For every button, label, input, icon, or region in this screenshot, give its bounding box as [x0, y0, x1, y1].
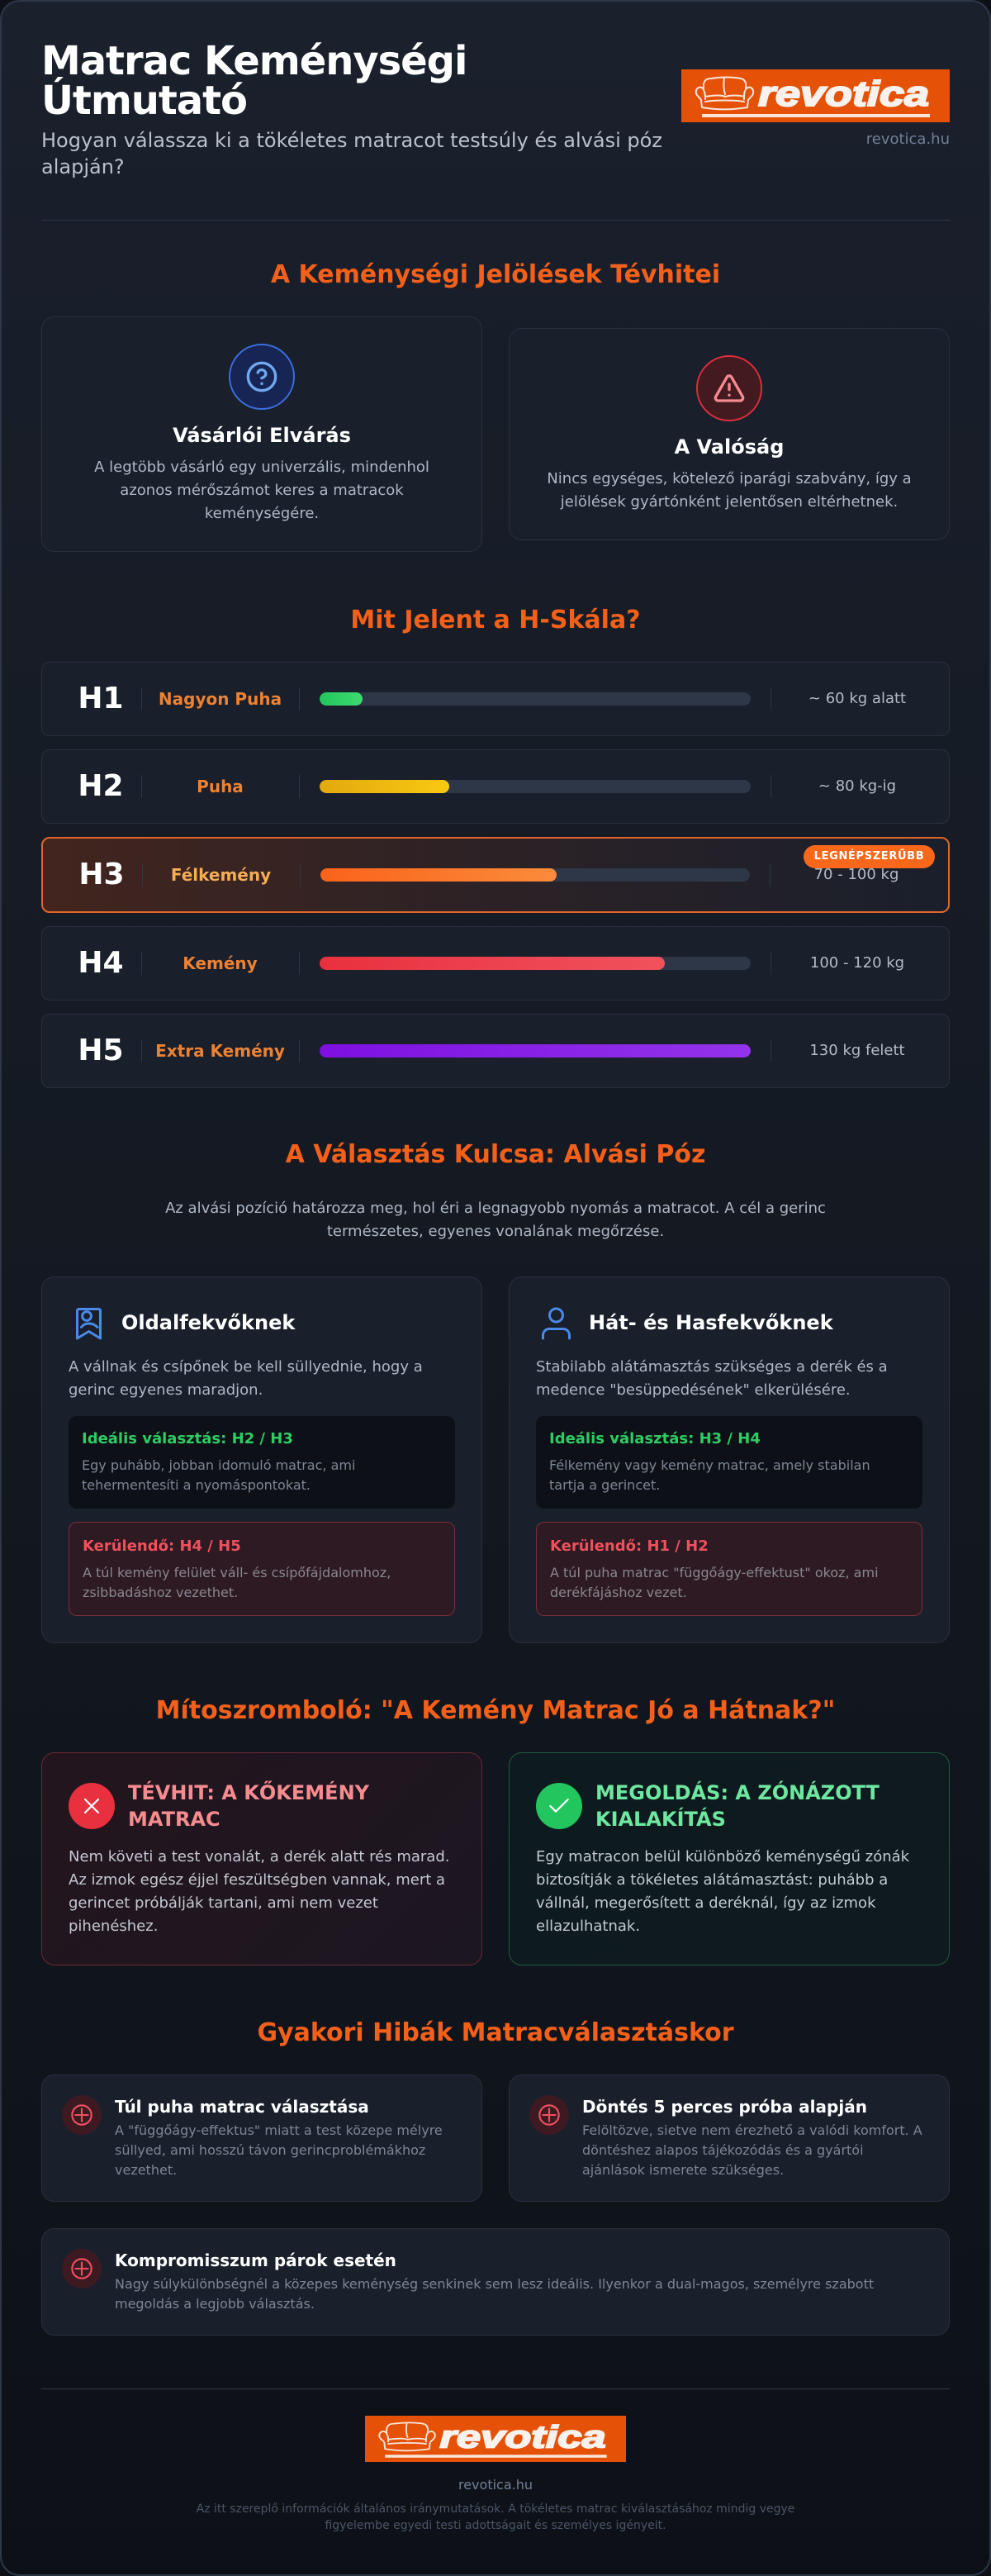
ideal choice text [82, 1457, 355, 1493]
icon: warning triangle [696, 355, 762, 421]
avoid text [550, 1565, 879, 1600]
H5 bar [320, 1044, 751, 1057]
mistake 2 text [582, 2122, 922, 2178]
reality text: jelölések gyártónként jelentősen eltérhetnek. [561, 493, 898, 511]
heading: labeling myths: A Keménységi Jelölések Tévhitei [271, 260, 720, 289]
mistake 3 text: Nagy súlykülönbségnél a közepes keménység senkinek sem lesz ideális. Ilyenkor a dual-magos, személyre szabott [115, 2276, 874, 2292]
mistake 2 title: Döntés 5 perces próba alapján [582, 2097, 867, 2117]
scale row H3 highlighted [41, 837, 950, 913]
reality text [547, 470, 912, 511]
H3 label: H3 [78, 858, 125, 891]
footer disclaimer: figyelembe egyedi testi adottságait és személyes igényeit. [325, 2519, 666, 2532]
H3 bar [320, 868, 750, 882]
mistake 1 title: Túl puha matrac választása [115, 2097, 369, 2117]
H4 bar [320, 957, 751, 970]
ideal choice text [549, 1457, 870, 1493]
buyer expectation text [94, 459, 429, 522]
footer disclaimer: Az itt szereplő információk általános iránymutatások. A tökéletes matrac kiválasztásához mindig vegye [197, 2502, 794, 2516]
intro text: Az alvási pozíció határozza meg, hol éri a legnagyobb nyomás a matracot. A cél a gerinc [165, 1200, 826, 1217]
footer disclaimer [197, 2502, 794, 2532]
solution text [536, 1848, 909, 1935]
footer website label: revotica.hu [458, 2477, 533, 2493]
myth text: Nem követi a test vonalát, a derék alatt rés marad. [69, 1848, 449, 1865]
H3 name: Félkemény [171, 865, 271, 885]
ideal choice box [536, 1416, 922, 1509]
H5 label: H5 [78, 1034, 124, 1067]
panel: myth [41, 1752, 482, 1965]
H5 weight: 130 kg felett [809, 1042, 905, 1059]
back sleepers text: medence "besüppedésének" elkerülésére. [536, 1381, 851, 1399]
myth text: Az izmok egész éjjel feszültségben vannak, mert a [69, 1871, 445, 1889]
header title: Útmutató [41, 78, 247, 124]
H4 weight: 100 - 120 kg [810, 954, 904, 972]
ideal choice text: tartja a gerincet. [549, 1477, 660, 1493]
header subtitle: alapján? [41, 155, 125, 178]
side sleepers text: gerinc egyenes maradjon. [69, 1381, 263, 1399]
panel: mistake 3 [41, 2228, 950, 2336]
solution text: ellazulhatnak. [536, 1918, 640, 1935]
mistake 3 title: Kompromisszum párok esetén [115, 2250, 396, 2270]
avoid text [83, 1565, 391, 1600]
avoid title: Kerülendő: H4 / H5 [83, 1538, 241, 1555]
buyer expectation text: keménységére. [205, 505, 319, 522]
avoid title: Kerülendő: H1 / H2 [550, 1538, 709, 1555]
panel: reality [509, 328, 950, 540]
scale row H4 [41, 926, 950, 1000]
solution heading: KIALAKÍTÁS [595, 1808, 726, 1831]
icon: mistake marker [529, 2095, 569, 2135]
myth text: pihenéshez. [69, 1918, 158, 1935]
buyer expectation heading: Vásárlói Elvárás [173, 424, 351, 447]
mistake 1 text: A "függőágy-effektus" miatt a test közepe mélyre [115, 2122, 443, 2138]
scale row H5 [41, 1014, 950, 1088]
mistake 1 text: vezethet. [115, 2162, 177, 2178]
solution text: vállnál, megerősített a deréknál, így az izmok [536, 1894, 875, 1912]
mistake 2 text: döntéshez alapos tájékozódás és a gyártói [582, 2142, 864, 2158]
intro text: természetes, egyenes vonalának megőrzése. [327, 1223, 664, 1240]
badge: most popular [804, 845, 935, 868]
icon: check [536, 1783, 582, 1829]
reality text: Nincs egységes, kötelező iparági szabvány, így a [547, 470, 912, 487]
header logo: revotica [758, 74, 929, 114]
myth heading: MATRAC [128, 1808, 220, 1831]
ideal choice text: Egy puhább, jobban idomuló matrac, ami [82, 1457, 355, 1473]
H1 weight: ~ 60 kg alatt [808, 690, 906, 707]
panel: mistake 1 [41, 2075, 482, 2202]
icon: side sleeper [76, 1308, 102, 1340]
badge: most popular: LEGNÉPSZERŰBB [814, 850, 924, 863]
H2 name: Puha [197, 777, 244, 796]
header subtitle: Hogyan válassza ki a tökéletes matracot testsúly és alvási póz [41, 129, 662, 152]
H1 name: Nagyon Puha [159, 689, 282, 709]
H2 label: H2 [78, 769, 124, 803]
solution text: Egy matracon belül különböző keménységű zónák [536, 1848, 909, 1865]
header subtitle [41, 129, 662, 178]
avoid box [69, 1522, 455, 1616]
avoid text: zsibbadáshoz vezethet. [83, 1585, 238, 1600]
icon: mistake marker [62, 2249, 102, 2288]
header logo [681, 69, 950, 122]
mistake 3 text: megoldás a legjobb választás. [115, 2296, 315, 2312]
back sleepers text [536, 1358, 888, 1399]
panel: side sleepers [41, 1276, 482, 1643]
scale row H2 [41, 749, 950, 824]
mistake 3 text [115, 2276, 874, 2312]
icon: mistake marker [62, 2095, 102, 2135]
reality heading: A Valóság [675, 435, 784, 459]
panel: mistake 2 [509, 2075, 950, 2202]
heading: common mistakes: Gyakori Hibák Matracválasztáskor [257, 2018, 734, 2047]
header website label: revotica.hu [866, 131, 950, 148]
intro text [165, 1200, 826, 1240]
mistake 2 text: ajánlások ismerete szükséges. [582, 2162, 784, 2178]
buyer expectation text: A legtöbb vásárló egy univerzális, mindenhol [94, 459, 429, 476]
ideal choice title: Ideális választás: H2 / H3 [82, 1430, 293, 1447]
H4 label: H4 [78, 946, 124, 980]
H4 name: Kemény [183, 953, 258, 973]
avoid box [536, 1522, 922, 1616]
footer logo [365, 2416, 626, 2462]
ideal choice text: tehermentesíti a nyomáspontokat. [82, 1477, 311, 1493]
solution heading [595, 1781, 880, 1831]
ideal choice title: Ideális választás: H3 / H4 [549, 1430, 761, 1447]
icon: cross [69, 1783, 115, 1829]
icon: question mark [229, 344, 295, 410]
avoid text: A túl kemény felület váll- és csípőfájdalomhoz, [83, 1565, 391, 1580]
heading: sleep position: A Választás Kulcsa: Alvási Póz [286, 1140, 705, 1169]
avoid text: A túl puha matrac "függőágy-effektust" okoz, ami [550, 1565, 879, 1580]
myth text: gerincet próbálják tartani, ami nem vezet [69, 1894, 378, 1912]
mistake 2 text: Felöltözve, sietve nem érezhető a valódi komfort. A [582, 2122, 922, 2138]
heading: myth buster: Mítoszromboló: "A Kemény Matrac Jó a Hátnak?" [156, 1696, 835, 1725]
H2 bar [320, 780, 751, 793]
icon: person [542, 1307, 571, 1340]
H5 name: Extra Kemény [155, 1041, 285, 1061]
H3 weight: 70 - 100 kg [814, 866, 899, 883]
H1 bar [320, 692, 751, 706]
side sleepers text [69, 1358, 423, 1399]
myth text [69, 1848, 449, 1935]
solution text: biztosítják a tökéletes alátámasztást: puhább a [536, 1871, 888, 1889]
back sleepers text: Stabilabb alátámasztás szükséges a derék és a [536, 1358, 888, 1376]
back sleepers heading: Hát- és Hasfekvőknek [589, 1311, 833, 1334]
myth heading [128, 1781, 370, 1831]
ideal choice box [69, 1416, 455, 1509]
scale row H1 [41, 662, 950, 736]
header title [41, 38, 467, 124]
footer logo: revotica [439, 2420, 606, 2455]
H1 label: H1 [78, 682, 124, 715]
H2 weight: ~ 80 kg-ig [818, 777, 896, 795]
panel: buyer expectation [41, 316, 482, 552]
buyer expectation text: azonos mérőszámot keres a matracok [120, 482, 404, 499]
panel: back and stomach sleepers [509, 1276, 950, 1643]
ideal choice text: Félkemény vagy kemény matrac, amely stabilan [549, 1457, 870, 1473]
mistake 1 text [115, 2122, 443, 2178]
myth heading: TÉVHIT: A KŐKEMÉNY [128, 1781, 369, 1804]
mistake 1 text: süllyed, ami hosszú távon gerincproblémákhoz [115, 2142, 425, 2158]
side sleepers text: A vállnak és csípőnek be kell süllyednie, hogy a [69, 1358, 423, 1376]
solution heading: MEGOLDÁS: A ZÓNÁZOTT [595, 1781, 880, 1804]
panel: solution [509, 1752, 950, 1965]
header title: Matrac Keménységi [41, 38, 467, 84]
avoid text: derékfájáshoz vezet. [550, 1585, 687, 1600]
side sleepers heading: Oldalfekvőknek [121, 1311, 295, 1334]
heading: H-scale: Mit Jelent a H-Skála? [350, 606, 641, 634]
